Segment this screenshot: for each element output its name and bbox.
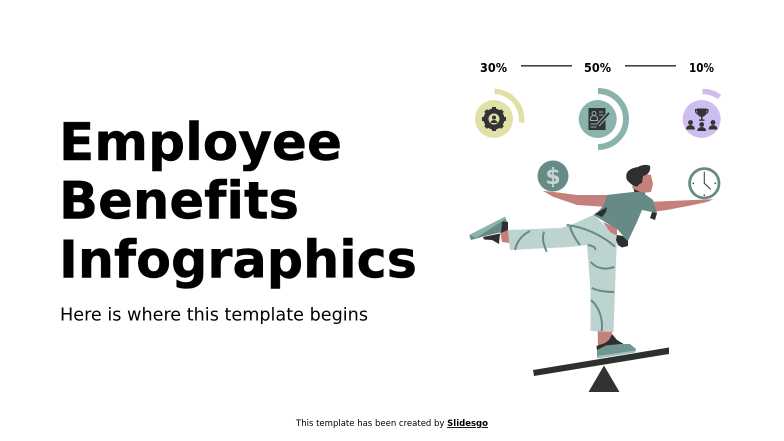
- gauge: 10% trophy: [683, 91, 721, 138]
- icon: dollar coin: [538, 160, 568, 192]
- skin at waist: [603, 222, 617, 236]
- title: Employee: [59, 113, 342, 173]
- footer credit: This template has been created by Slidesgo: [295, 419, 488, 429]
- shirt shadow: [595, 207, 607, 217]
- percentage row: [480, 61, 714, 75]
- trousers: [508, 215, 617, 332]
- icon: dollar coin: $: [545, 165, 561, 190]
- title: Benefits: [59, 172, 299, 232]
- right arm: [653, 199, 713, 212]
- icon: document with pen: [588, 108, 609, 130]
- label: 50%: 50%: [584, 61, 611, 75]
- label: 30%: 30%: [480, 61, 507, 75]
- shirt: [593, 192, 657, 241]
- icon: clock: [690, 169, 719, 198]
- standing foot: [596, 331, 636, 358]
- seesaw: [533, 348, 669, 392]
- label: 10%: 10%: [689, 61, 714, 75]
- raised foot: [469, 217, 510, 244]
- gauge: 30% gear: [475, 92, 522, 138]
- connector line: 30% to 50%: [521, 65, 572, 67]
- icon: gear with person: [482, 107, 506, 131]
- sleeve shadow: [650, 212, 657, 220]
- illustration: balancing person: [469, 160, 719, 392]
- neck and head: [626, 165, 653, 195]
- title: [59, 113, 417, 291]
- left arm: [543, 191, 607, 207]
- gauge: 50% document: [579, 91, 626, 147]
- subtitle: Here is where this template begins: [60, 306, 368, 326]
- connector line: 50% to 10%: [625, 65, 676, 67]
- elbow accent: [616, 235, 628, 248]
- icon: trophy and team: [686, 108, 718, 131]
- title: Infographics: [59, 231, 417, 291]
